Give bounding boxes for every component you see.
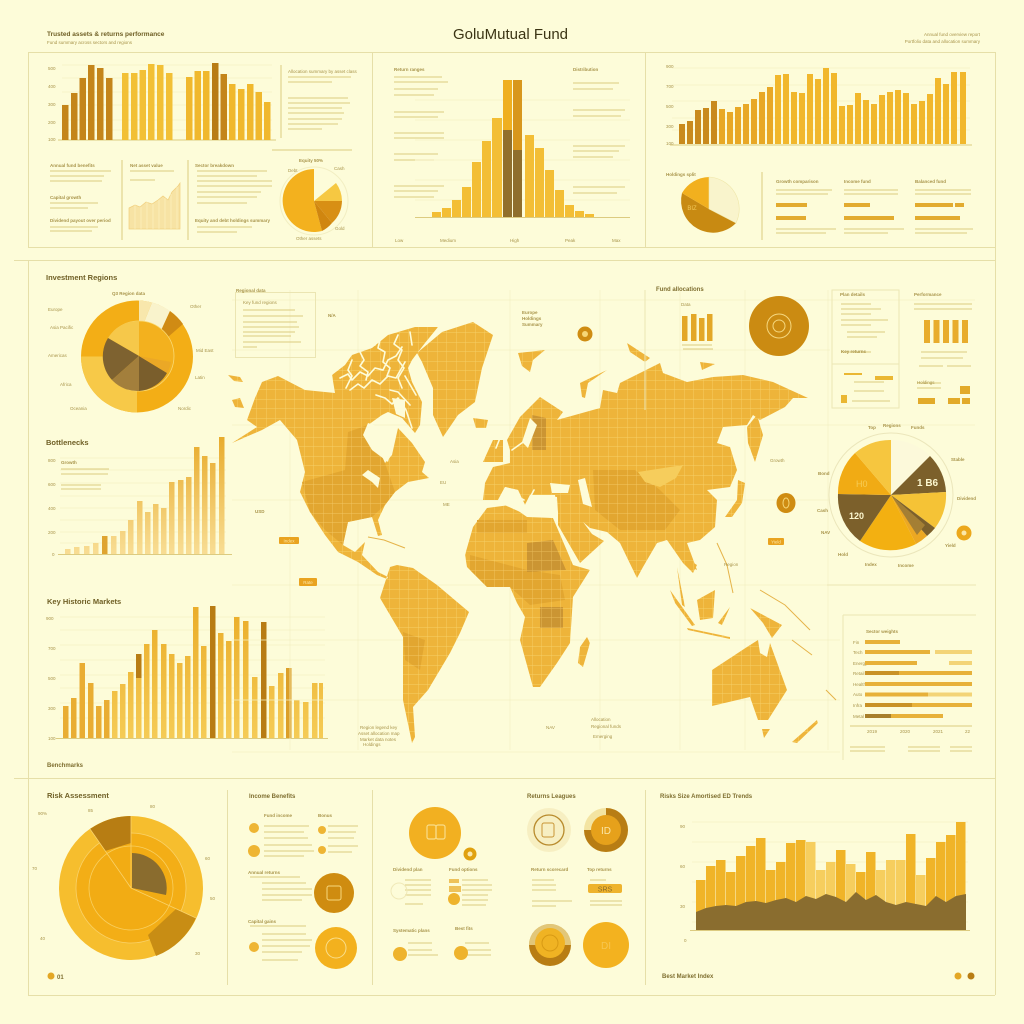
text blocks: Return scorecard [531,867,569,872]
bar chart: performance history: 900 [666,64,674,69]
icon: coin [315,927,357,969]
bar chart: growth: 200 [48,530,56,535]
map labels: Allocation [591,717,611,722]
stacked bar chart: 90 [680,824,686,829]
bar chart: growth: 800 [48,458,56,463]
pie labels: Dividend [957,496,976,501]
box: bars and notes [914,292,972,404]
box: summary notes [832,290,899,408]
icon: swirl coin [529,924,571,966]
box: bars and notes: Holdings [917,380,935,385]
header right: Annual fund overview report [924,32,981,37]
text block and bars: fund comparison: Income fund [844,179,871,184]
horizontal bar chart: Health [853,682,867,687]
panel: risk assessment [32,791,216,981]
donut chart: Nordic [178,406,192,411]
legend [48,972,64,981]
bar chart: growth: 400 [48,506,56,511]
histogram: Medium [440,238,456,243]
text blocks: SRS [598,886,613,894]
icon: progress donut: ID [601,826,611,837]
horizontal bar chart: Fin [853,640,860,645]
pie chart: holdings: Holdings split [666,172,696,177]
map: small island chains [368,537,836,700]
text block: left notes: Return ranges [394,67,425,72]
histogram [395,80,630,243]
heading: Investment Regions [46,273,117,282]
legend icons [954,972,974,980]
histogram: Max [612,238,621,243]
benefit rows [248,813,358,960]
concentric pie chart: 30 [195,951,201,956]
bar chart: history: 900 [46,616,54,621]
heading: Key Historic Markets [47,597,121,606]
map labels: Growth [770,458,785,463]
panel: top left [48,63,358,241]
icon: map marker coin [776,493,796,513]
concentric pie chart [32,804,216,960]
bar chart: quarterly returns: 100 [48,137,56,142]
text blocks: Systematic plans [393,928,430,933]
concentric pie chart: 40 [40,936,46,941]
map labels: EU [440,480,446,485]
panel: top right [666,64,973,240]
donut chart: Europe [48,307,63,312]
text blocks: Dividend plan [393,867,423,872]
donut chart: Americas [48,353,68,358]
panel: top center histogram [394,67,630,243]
text block: left notes [394,67,448,197]
area chart [122,160,180,240]
bar chart: history: 100 [48,736,56,741]
text block: middle: Sector breakdown [195,163,234,168]
map labels: Yield [771,540,781,544]
bar chart: performance history [666,64,972,146]
pie labels: Top [868,425,876,430]
donut chart: Latin [195,375,205,380]
horizontal bar chart: Tech [853,650,863,655]
map labels: Market data notes [360,737,397,742]
benefit rows: Bonus [318,813,332,818]
box: summary notes: Plan details [840,292,866,297]
map: arctic channels and inland water [340,332,534,505]
icon: small coin [464,848,476,860]
map labels: Emerging [593,734,613,739]
histogram: Peak [565,238,576,243]
map labels: Holdings [363,742,381,747]
section: investment regions donut [46,273,214,412]
map labels: Index [283,538,295,544]
panel: top right of map [645,287,809,410]
map labels: Region [724,562,739,567]
text blocks: Top returns [587,867,612,872]
heading: Bottlenecks [46,438,89,447]
text blocks [531,867,622,906]
section: key historic chart [46,597,328,769]
small bar chart [681,302,713,349]
horizontal bar chart: Energy [853,661,868,666]
bar chart: quarterly returns: 500 [48,66,56,71]
bar chart: growth: 600 [48,482,56,487]
world map [228,290,975,752]
horizontal bar chart [827,585,976,760]
text block: lower left: Dividend payout over period [50,218,111,223]
heading: Risk Assessment [47,791,109,800]
horizontal bar chart: 2020 [900,729,911,734]
header right: Portfolio data and allocation summary [905,39,981,44]
area chart: Net asset value [130,163,163,168]
footnote: Best Market Index [662,974,714,980]
pie labels: Stable [951,457,965,462]
stacked bar chart: 0 [684,938,687,943]
concentric pie chart: 50 [210,896,216,901]
text block and bars: fund comparison: Balanced fund [915,179,946,184]
header left: Trusted assets & returns performance [47,31,165,38]
pie labels: Income [898,563,914,568]
pie chart: allocation: Equity 50% [299,158,323,163]
horizontal bar chart: 22 [965,729,971,734]
icon: progress donut [584,808,628,852]
text block: middle [188,160,272,240]
panel: regional text note [236,288,316,358]
map labels: N/A [328,313,336,318]
pie labels: Index [865,562,877,567]
pie chart: allocation: Other assets [296,236,322,241]
donut chart: Mid East [196,348,214,353]
text blocks: Fund options [449,867,478,872]
map labels: Asia [450,459,459,464]
stacked bar chart: 60 [680,864,686,869]
icon: solid coin [583,922,629,968]
bar chart: growth: Growth [61,460,77,465]
bar chart: history: 700 [48,646,56,651]
small bar chart: Data [681,302,691,307]
pie labels: Cash [817,508,828,513]
pie labels: Bond [818,471,830,476]
horizontal bar chart: Auto [853,692,863,697]
donut chart: Q3 Region data [112,291,146,296]
text block: right legend: Allocation summary by asset class [288,69,358,74]
map labels [255,310,785,747]
panel: regional text note: Regional data [236,288,266,293]
pie chart: holdings: BIZ [687,206,697,212]
bar chart: history [46,606,328,741]
icon: medal circle [749,296,809,356]
bar chart: performance history: 300 [666,124,674,129]
map: continents [228,322,818,743]
pie chart: allocation: Debt [288,168,298,173]
heading: Risks Size Amortised ED Trends [660,794,753,800]
heading: benchmarks: Benchmarks [47,763,84,769]
bar chart: quarterly returns: 300 [48,102,56,107]
title: GoluMutual Fund [453,26,568,43]
benefit rows: Capital gains [248,919,277,924]
donut chart: Asia Pacific [50,325,74,330]
histogram: Low [395,238,404,243]
icon: coin [956,526,972,540]
map labels: NAV [546,725,555,730]
heading: Returns Leagues [527,794,576,800]
legend: 01 [57,975,64,981]
heading: Fund allocations [656,287,704,293]
donut chart: Other [190,304,202,309]
text blocks: Best fits [455,926,473,931]
map: darker regions [302,415,683,670]
horizontal bar chart: Infra [853,703,863,708]
pie labels: Hold [838,552,848,557]
text blocks [391,867,492,961]
map background grid [232,290,975,752]
box: summary notes: Key returns [841,349,867,354]
text block and bars: fund comparison: Growth comparison [776,179,819,184]
horizontal bar chart: Sector weights [866,629,899,634]
icon: wallet [314,873,354,913]
map labels: ME [443,502,450,507]
panel: returns leagues [527,794,629,968]
bar chart: growth: 0 [52,552,55,557]
text block: right legend [272,65,358,150]
benefit rows: Annual returns [248,870,281,875]
text block and bars: fund comparison [762,172,973,240]
pie chart: global share: 1 B6 [917,478,939,489]
stacked bar chart: 30 [680,904,686,909]
pie chart: holdings [666,172,739,233]
concentric pie chart: 85 [88,808,94,813]
pie labels: Yield [945,543,956,548]
section: benchmarks chart [46,437,232,557]
bar chart: performance history: 700 [666,84,674,89]
pie chart: allocation: Gold [335,226,345,231]
map labels: Region legend key [360,725,398,730]
icon: card circle [409,807,461,859]
concentric pie chart: 90% [38,811,47,816]
pie chart: allocation [280,158,348,241]
horizontal bar chart: Retail [853,671,865,676]
concentric pie chart: 70 [32,866,38,871]
stacked bar chart [680,822,970,943]
donut chart [48,291,214,412]
map labels: Europe [522,310,538,315]
heading: Income Benefits [249,794,296,800]
text block: lower left [50,163,111,231]
pie chart: global share: H0 [856,479,868,489]
pie chart: global share [817,423,976,568]
text block: lower left: Annual fund benefits [50,163,95,168]
horizontal bar chart: 2019 [867,729,878,734]
pie chart: allocation: Cash [334,166,345,171]
header left: Fund summary across sectors and regions [47,40,133,45]
donut chart: Africa [60,382,72,387]
text block: right notes: Distribution [573,67,598,72]
bar chart: performance history: 100 [666,141,674,146]
map labels: Regional funds [591,724,622,729]
map labels: Rate [303,580,313,585]
text block: right notes [573,67,625,193]
histogram: High [510,238,520,243]
panel: regional text note: Key fund regions [243,300,278,305]
bar chart: growth [48,437,232,557]
pie labels: Funds [911,425,925,430]
bar chart: quarterly returns [48,63,276,142]
donut chart: Oceania [70,406,87,411]
map labels: USD [255,509,265,514]
panel: income benefits [248,794,358,969]
icon: solid coin: DI [601,941,611,952]
map labels: Asset allocation map [358,731,400,736]
horizontal bar chart: 2021 [933,729,944,734]
concentric pie chart: 60 [205,856,211,861]
pie labels [817,423,976,568]
map labels: Holdings [522,316,542,321]
horizontal bar chart: Metal [853,714,864,719]
pie labels: Regions [883,423,901,428]
benefit rows: Fund income [264,813,292,818]
panel: right text boxes [832,290,972,408]
header left [47,31,165,45]
map labels: Summary [522,322,543,327]
panel: services [391,807,492,961]
box: bars and notes: Performance [914,292,942,297]
bar chart: quarterly returns: 200 [48,120,56,125]
panel: trends chart [660,794,974,980]
bar chart: history: 300 [48,706,56,711]
bar chart: history: 500 [48,676,56,681]
pie chart: global share: 120 [849,511,864,521]
pie labels: NAV [821,530,830,535]
bar chart: quarterly returns: 400 [48,84,56,89]
icon: ring document [527,808,571,852]
bar chart: performance history: 500 [666,104,674,109]
text block: lower left: Capital growth [50,195,82,200]
icon: map marker drop [578,326,592,342]
concentric pie chart: 80 [150,804,156,809]
header right [905,32,981,44]
text block: middle: Equity and debt holdings summary [195,218,271,223]
